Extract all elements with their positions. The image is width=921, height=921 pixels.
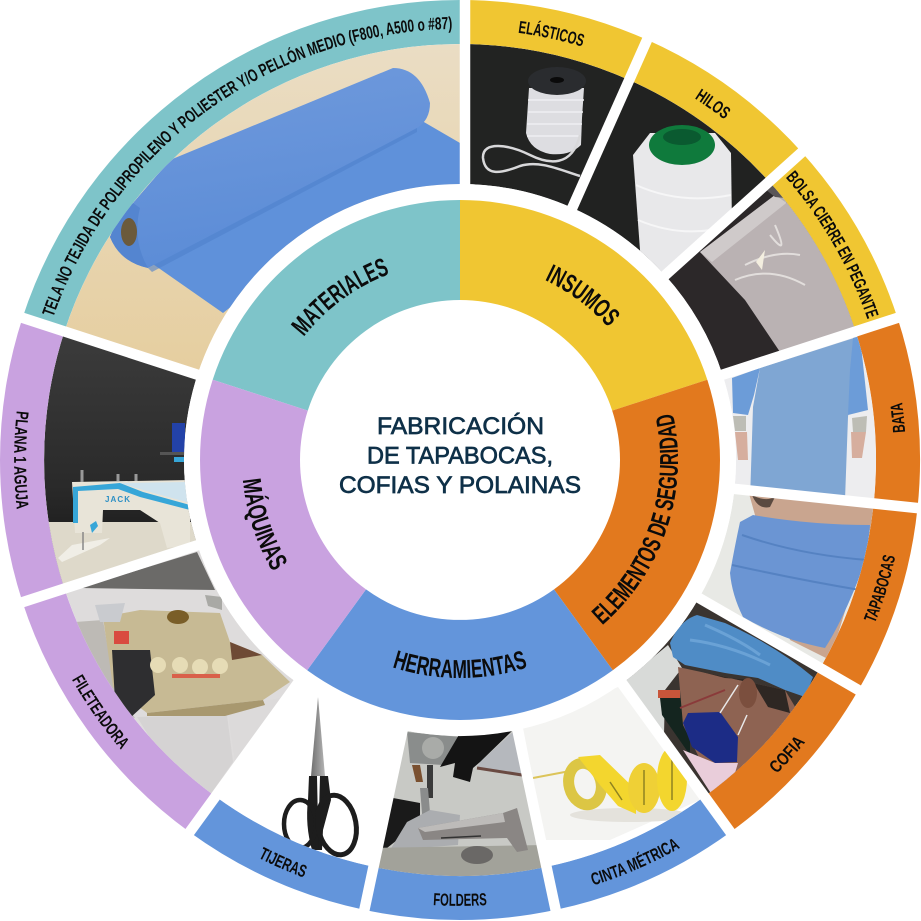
panel: folders — [370, 731, 550, 920]
photo: scissors — [220, 698, 368, 866]
photo: straight stitch machine: JACK — [105, 495, 130, 504]
panel: fileteadora — [24, 550, 294, 829]
label: fileteadora: FILETEADORA — [72, 674, 128, 750]
label: bolsa: BOLSA CIERRE EN PEGANTE — [786, 170, 879, 319]
photo: elastic spool — [460, 44, 629, 208]
band: cinta métrica — [546, 796, 730, 910]
label: máquinas: MÁQUINAS — [242, 478, 286, 570]
band: bolsa — [769, 152, 898, 332]
label: hilos: HILOS — [695, 88, 730, 118]
panel: elementos de seguridad — [554, 380, 720, 670]
panel: bolsa cierre en pegante — [668, 156, 896, 370]
panel: cofia — [626, 602, 856, 829]
title: FABRICACIÓN — [377, 413, 544, 440]
photo: blue fabric roll — [64, 44, 460, 375]
band: tela — [22, 0, 460, 332]
panel: tela no tejida — [24, 0, 460, 370]
photo: sewing folder — [378, 731, 542, 876]
band: bata — [856, 318, 920, 508]
photo: overlock machine — [64, 545, 298, 796]
photo: plastic bag — [668, 186, 854, 370]
title — [339, 413, 581, 499]
band: cofia — [704, 668, 858, 832]
photo: face mask — [702, 494, 874, 664]
label: bata: BATA — [890, 402, 906, 432]
panel: plana 1 aguja — [0, 322, 196, 598]
photo: measuring tape — [517, 683, 704, 867]
label: elementos de seguridad: ELEMENTOS DE SEGURIDAD — [591, 414, 678, 625]
photo: straight stitch machine — [44, 336, 196, 584]
photo: worker with hair cap — [622, 598, 820, 800]
segment: herramientas — [307, 589, 613, 720]
label: cinta métrica: CINTA MÉTRICA — [591, 838, 680, 884]
label: tijeras: TIJERAS — [260, 846, 307, 877]
panel: bata — [724, 322, 920, 503]
segment: elementos de seguridad — [554, 380, 720, 670]
label: elásticos: ELÁSTICOS — [518, 20, 584, 46]
label: folders: FOLDERS — [434, 893, 486, 906]
segment: máquinas — [200, 380, 366, 670]
band: elásticos — [460, 0, 647, 80]
band: plana — [0, 318, 64, 602]
segment: insumos — [460, 200, 707, 411]
label: cofia: COFIA — [770, 737, 806, 772]
band: fileteadora — [22, 588, 216, 832]
panel: máquinas — [200, 380, 366, 670]
title: DE TAPABOCAS, — [367, 442, 553, 470]
panel: tapabocas — [702, 494, 917, 686]
label: plana 1 aguja: PLANA 1 AGUJA — [14, 412, 29, 510]
panel: cinta métrica — [524, 687, 726, 909]
photo: thread cone — [577, 82, 766, 272]
photo: blue gown — [722, 332, 876, 504]
title: COFIAS Y POLAINAS — [339, 472, 581, 499]
label: tela: TELA NO TEJIDA DE POLIPROPILENO Y POLIESTER Y/O PELLÓN MEDIO (F800, A500 o #87) — [42, 16, 452, 315]
panel: materiales — [212, 200, 460, 411]
label: herramientas: HERRAMIENTAS — [393, 650, 526, 678]
panel: tijeras — [194, 698, 368, 909]
panel: hilos — [577, 42, 798, 272]
panel: elásticos — [470, 0, 642, 206]
panel: herramientas — [307, 590, 613, 720]
label: materiales: MATERIALES — [290, 258, 388, 336]
label: insumos: INSUMOS — [546, 264, 620, 326]
band: tapabocas — [820, 504, 918, 690]
band: folders — [364, 867, 556, 920]
label: tapabocas: TAPABOCAS — [864, 555, 895, 621]
band: tijeras — [190, 796, 374, 910]
band: hilos — [629, 40, 802, 182]
panel: insumos — [460, 200, 708, 411]
segment: materiales — [213, 200, 460, 411]
